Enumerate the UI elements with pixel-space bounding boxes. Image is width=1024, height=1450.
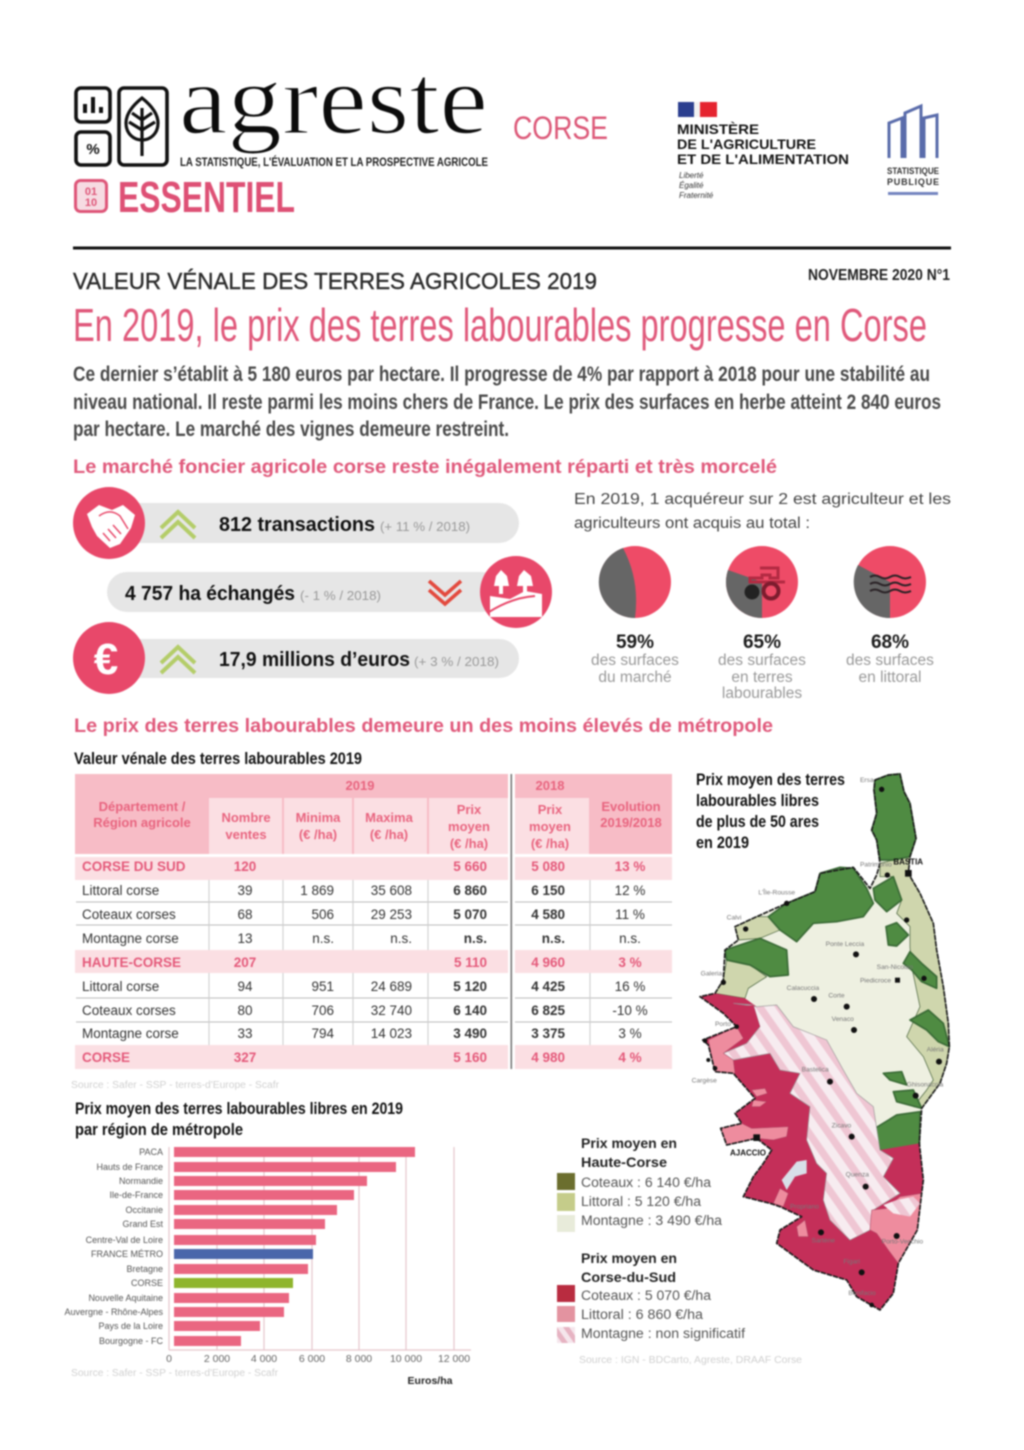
towns: [703, 787, 942, 1307]
row: Coteaux corses sud: Coteaux corses: [82, 907, 176, 922]
legend: Haute-Corse: Haute-Corse: [581, 1155, 668, 1170]
row: Corse du Sud: 5 080: [531, 859, 565, 874]
essentiel label: [76, 173, 295, 222]
tagline: LA STATISTIQUE, L'ÉVALUATION ET LA PROSPECTIVE AGRICOLE: [180, 154, 488, 169]
legend: Corse-du-Sud: Corse-du-Sud: [581, 1270, 676, 1285]
region name: CORSE: [513, 110, 608, 146]
town labels: Bonifacio: [848, 1290, 876, 1297]
icon: tractor: [746, 568, 785, 598]
table header: (€ /ha): [299, 827, 337, 842]
ministry logo: Fraternité: [679, 191, 714, 200]
row: Corse total: CORSE: [82, 1050, 130, 1065]
table header: Evolution: [601, 799, 661, 814]
row: Coteaux corses sud: 11 %: [615, 907, 645, 922]
row: Montagne corse sud: n.s.: [542, 931, 565, 946]
pie: 65 percent: en terres: [731, 669, 793, 686]
legend: Corse-du-Sud: Littoral : 6 860 €/ha: [581, 1307, 704, 1322]
pill: euros: (+ 3 % / 2018): [414, 654, 499, 669]
row: Littoral corse sud: 1 869: [300, 883, 334, 898]
row: Montagne corse sud: n.s.: [619, 931, 641, 946]
map: Corse: [692, 774, 949, 1310]
row: Littoral corse sud: 6 860: [453, 883, 487, 898]
intro paragraph: par hectare. Le marché des vignes demeure restreint.: [73, 418, 509, 441]
row: Montagne corse haute: Montagne corse: [82, 1026, 179, 1041]
legend: Haute-Corse: Littoral : 5 120 €/ha: [581, 1194, 701, 1209]
table header: Département /: [99, 799, 186, 814]
row: Coteaux corses sud: 4 580: [531, 907, 565, 922]
town labels: Cargèse: [692, 1077, 717, 1084]
category labels: [64, 1147, 163, 1346]
icon: land and trees: [489, 570, 542, 617]
table source: Source : Safer - SSP - terres-d'Europe - Scafr: [71, 1080, 280, 1091]
ministry logo: [677, 102, 849, 200]
category labels: Nouvelle Aquitaine: [88, 1293, 163, 1303]
table header: 2019/2018: [600, 815, 662, 830]
pill: transactions: 812 transactions: [219, 514, 375, 536]
legend: Haute-Corse: Prix moyen en: [581, 1136, 677, 1151]
legend: Haute-Corse: Coteaux : 6 140 €/ha: [581, 1175, 712, 1190]
category labels: Occitanie: [125, 1205, 163, 1215]
row: Haute-Corse: 3 %: [618, 955, 642, 970]
text: acquéreurs: [574, 491, 951, 532]
pale hatched patch: [883, 1197, 920, 1217]
row: Haute-Corse: 207: [234, 955, 256, 970]
category labels: Bourgogne - FC: [99, 1336, 163, 1346]
icon: binary box: [76, 180, 106, 212]
row: Montagne corse haute: 3 490: [453, 1026, 487, 1041]
category labels: FRANCE MÉTRO: [91, 1249, 163, 1259]
statistique publique logo: PUBLIQUE: [887, 177, 939, 187]
row: Haute-Corse: HAUTE-CORSE: [82, 955, 181, 970]
Haute-Corse montagne base: [715, 774, 949, 1150]
legend: Haute-Corse: Montagne : 3 490 €/ha: [581, 1213, 723, 1228]
row: Coteaux corses haute: 80: [237, 1003, 253, 1018]
row: Montagne corse haute: 3 375: [531, 1026, 565, 1041]
row: Littoral corse sud: 6 150: [531, 883, 565, 898]
coastline: [700, 774, 949, 1310]
table header: moyen: [529, 819, 571, 834]
pie: 68 percent: [846, 546, 934, 686]
row: Corse du Sud: 5 660: [453, 859, 487, 874]
row: Montagne corse haute: 33: [237, 1026, 253, 1041]
Corse-du-Sud montagne hatch: [723, 1003, 900, 1240]
row: Montagne corse haute: [82, 1026, 642, 1041]
row: Coteaux corses sud: 5 070: [453, 907, 487, 922]
chart title: par région de métropole: [75, 1120, 243, 1139]
row: Littoral corse sud: 35 608: [371, 883, 412, 898]
axis labels: 2 000: [204, 1353, 230, 1365]
axis labels: 0: [166, 1353, 172, 1365]
section heading: marché foncier: Le marché foncier agricole corse reste inégalement réparti et très morcelé: [73, 457, 777, 478]
pie: 65 percent: [718, 546, 806, 702]
icon: handshake: [87, 505, 135, 548]
icon: french flag: [678, 102, 717, 117]
town labels: Quenza: [846, 1172, 869, 1179]
statistique publique logo: [887, 106, 939, 195]
legend: Corse-du-Sud: Montagne : non significatif: [581, 1326, 745, 1341]
pill: euros: 17,9 millions d’euros: [219, 649, 410, 671]
row: Corse total: 4 %: [618, 1050, 642, 1065]
Corse-du-Sud crimson patch: [700, 995, 760, 1037]
bar chart: prix par région: Euros/ha: [408, 1375, 453, 1387]
row: Littoral corse haute: Littoral corse: [82, 979, 159, 994]
row: Corse du Sud: 13 %: [615, 859, 645, 874]
icon: up chevrons: [161, 512, 195, 538]
kicker: VALEUR VÉNALE DES TERRES AGRICOLES 2019: [73, 268, 597, 294]
Haute-Corse coteaux: [725, 774, 949, 1155]
town labels: AJACCIO: [730, 1148, 766, 1157]
bars: [174, 1147, 415, 1346]
row: Littoral corse sud: [82, 883, 645, 898]
table header: ventes: [225, 827, 267, 842]
row: Coteaux corses sud: 68: [237, 907, 253, 922]
Corse-du-Sud coteaux: [700, 993, 923, 1310]
pie: 65 percent: 65%: [743, 632, 781, 653]
table header: (€ /ha): [370, 827, 408, 842]
category labels: Normandie: [119, 1176, 163, 1186]
category labels: PACA: [139, 1147, 163, 1157]
pie: 68 percent: des surfaces: [846, 652, 934, 669]
row: Coteaux corses haute: Coteaux corses: [82, 1003, 176, 1018]
row: Littoral corse sud: Littoral corse: [82, 883, 159, 898]
row: Coteaux corses haute: 6 140: [453, 1003, 487, 1018]
panel: key figures: [73, 487, 552, 694]
town labels: Zicavo: [832, 1123, 852, 1130]
row: Coteaux corses haute: [82, 1003, 648, 1018]
town labels: Piedicroce: [860, 977, 891, 984]
chart source: Source : Safer - SSP - terres-d'Europe - Scafr: [71, 1368, 279, 1379]
pie: 59 percent: 59%: [616, 632, 654, 653]
table header: Région agricole: [93, 815, 191, 830]
row: Littoral corse haute: 5 120: [453, 979, 487, 994]
town labels: Galeria: [701, 970, 722, 977]
town labels: L'Île-Rousse: [758, 888, 795, 897]
ministry logo: Égalité: [679, 181, 704, 190]
row: Littoral corse haute: 4 425: [531, 979, 565, 994]
row: Montagne corse haute: 794: [311, 1026, 334, 1041]
table header: Prix: [457, 802, 482, 817]
axis labels: 10 000: [390, 1353, 422, 1365]
icon: down chevrons: [429, 581, 461, 604]
row: Coteaux corses haute: 6 825: [531, 1003, 565, 1018]
legend: Corse-du-Sud: Prix moyen en: [581, 1251, 677, 1266]
pie: 68 percent: en littoral: [859, 669, 921, 686]
table title: Valeur vénale des terres labourables 2019: [74, 749, 362, 768]
town labels: Porto-Vecchio: [882, 1238, 923, 1245]
agreste logo: [76, 44, 488, 169]
row: Montagne corse haute: 14 023: [371, 1026, 412, 1041]
town labels: Calvi: [727, 914, 742, 921]
town labels: Aléria: [927, 1047, 944, 1054]
map title: Prix moyen des terres: [696, 770, 845, 789]
category labels: Pays de la Loire: [98, 1321, 163, 1331]
legend: Corse-du-Sud: [557, 1251, 745, 1343]
pie: 59 percent: [591, 546, 679, 686]
table header: Maxima: [365, 810, 414, 825]
section heading: prix: Le prix des terres labourables demeure un des moins élevés de métropole: [74, 716, 773, 737]
pie: 68 percent: 68%: [871, 632, 909, 653]
text: acquéreurs: En 2019, 1 acquéreur sur 2 est agriculteur et les: [574, 491, 951, 508]
category labels: Hauts de France: [96, 1162, 163, 1172]
pill: transactions: (+ 11 % / 2018): [380, 519, 470, 534]
icon: binary box: 10: [85, 197, 97, 209]
pill: euros: [73, 622, 519, 694]
row: Coteaux corses sud: [82, 907, 645, 922]
icon: binary box: 01: [85, 186, 97, 198]
row: Littoral corse haute: 94: [237, 979, 253, 994]
table header: Prix: [538, 802, 563, 817]
town labels: Patrimonio: [860, 862, 892, 869]
row: Corse total: 5 160: [453, 1050, 487, 1065]
chart title: [75, 1099, 403, 1139]
table header: (€ /ha): [450, 836, 488, 851]
pill: hectares: (- 1 % / 2018): [300, 588, 381, 603]
icon: percent box: [76, 132, 110, 165]
row: Corse du Sud: 120: [234, 859, 256, 874]
table header: Nombre: [221, 810, 271, 825]
pie: 65 percent: labourables: [722, 685, 802, 702]
table: valeur vénale: [75, 774, 672, 1069]
wordmark: agreste: [179, 44, 488, 155]
map source: Source : IGN - BDCarto, Agreste, DRAAF Corse: [579, 1355, 802, 1366]
row: Corse du Sud: CORSE DU SUD: [82, 859, 186, 874]
row: Corse total: 327: [234, 1050, 256, 1065]
table header: (€ /ha): [531, 836, 569, 851]
icon: percent box: %: [86, 141, 100, 158]
icon: euro: €: [94, 635, 118, 684]
row: Montagne corse sud: n.s.: [390, 931, 412, 946]
table header: 2018: [536, 778, 564, 793]
pie: 59 percent: des surfaces: [591, 652, 679, 669]
row: Coteaux corses haute: 32 740: [371, 1003, 412, 1018]
town labels: Sartène: [812, 1238, 835, 1245]
legend: Corse-du-Sud: Coteaux : 5 070 €/ha: [581, 1288, 712, 1303]
pie: 65 percent: des surfaces: [718, 652, 806, 669]
row: Haute-Corse: 5 110: [454, 955, 487, 970]
row: Montagne corse sud: Montagne corse: [82, 931, 179, 946]
row: Corse total: 4 980: [531, 1050, 565, 1065]
town labels: Bastelica: [802, 1067, 829, 1074]
row: Littoral corse haute: [82, 979, 645, 994]
category labels: Grand Est: [122, 1219, 163, 1229]
issue date: NOVEMBRE 2020 N°1: [808, 267, 950, 284]
axis labels: 6 000: [299, 1353, 325, 1365]
row: Coteaux corses haute: 706: [311, 1003, 334, 1018]
map title: [696, 770, 845, 852]
pill: hectares: [107, 556, 552, 628]
icon: buildings: [889, 106, 937, 158]
row: Montagne corse haute: 3 %: [618, 1026, 642, 1041]
statistique publique logo: STATISTIQUE: [887, 166, 939, 176]
town labels: San-Nicolao: [877, 964, 913, 971]
map title: en 2019: [696, 833, 749, 852]
row: Coteaux corses sud: 506: [311, 907, 334, 922]
lake area: [782, 1160, 807, 1190]
table header: [75, 774, 672, 854]
map title: de plus de 50 ares: [696, 812, 819, 831]
chart title: Prix moyen des terres labourables libres en 2019: [75, 1099, 403, 1118]
town labels: BASTIA: [893, 858, 923, 867]
town labels: [692, 777, 944, 1297]
town labels: Ponte Leccia: [826, 941, 864, 948]
row: Littoral corse sud: 39: [237, 883, 253, 898]
ministry logo: DE L'AGRICULTURE: [677, 136, 816, 152]
row: Coteaux corses haute: -10 %: [612, 1003, 648, 1018]
town labels: Ersa: [860, 777, 874, 784]
pill: hectares: 4 757 ha échangés: [125, 583, 295, 605]
pill: transactions: [73, 487, 519, 559]
axis labels: 8 000: [346, 1353, 372, 1365]
category labels: CORSE: [131, 1278, 163, 1288]
row: Corse du Sud: [82, 859, 645, 874]
row: Montagne corse sud: [82, 931, 641, 946]
category labels: Auvergne - Rhône-Alpes: [64, 1307, 163, 1317]
row: Littoral corse haute: 24 689: [371, 979, 412, 994]
pie: 59 percent: du marché: [598, 669, 672, 686]
ministry logo: MINISTÈRE: [677, 121, 759, 137]
table header: 2019: [346, 778, 374, 793]
map title: labourables libres: [696, 791, 819, 810]
town labels: Porto: [715, 1021, 731, 1028]
icon: waves: [870, 576, 911, 592]
row: Littoral corse haute: 16 %: [615, 979, 645, 994]
row: Littoral corse sud: 12 %: [615, 883, 645, 898]
row: Haute-Corse: [82, 955, 642, 970]
legend: Haute-Corse: [557, 1136, 723, 1232]
category labels: Ile-de-France: [109, 1190, 163, 1200]
row: Haute-Corse: 4 960: [531, 955, 565, 970]
axis labels: [166, 1353, 470, 1365]
town labels: Venaco: [832, 1016, 854, 1023]
row: Coteaux corses sud: 29 253: [371, 907, 412, 922]
row: Corse total: [82, 1050, 642, 1065]
town labels: Figari: [843, 1258, 860, 1265]
row: Montagne corse sud: 13: [237, 931, 253, 946]
axis labels: 4 000: [251, 1353, 277, 1365]
category labels: Bretagne: [126, 1264, 163, 1274]
intro paragraph: [73, 363, 941, 441]
row: Montagne corse sud: n.s.: [312, 931, 334, 946]
town labels: Corte: [828, 993, 845, 1000]
table header: moyen: [448, 819, 490, 834]
table header: Minima: [296, 810, 341, 825]
row: Littoral corse haute: 951: [311, 979, 334, 994]
town labels: Propriano: [790, 1203, 819, 1210]
ministry logo: Liberté: [679, 171, 704, 180]
icon: leaf box: [119, 88, 167, 165]
town labels: Ghisonaccia: [907, 1082, 944, 1089]
Corse-du-Sud littoral: [708, 1027, 922, 1263]
town labels: Calacuccia: [787, 985, 820, 992]
row: Montagne corse sud: n.s.: [464, 931, 487, 946]
axis labels: 12 000: [438, 1353, 470, 1365]
essentiel word: ESSENTIEL: [118, 173, 295, 222]
category labels: Centre-Val de Loire: [86, 1235, 163, 1245]
text: acquéreurs: agriculteurs ont acquis au total :: [574, 515, 810, 532]
bar chart: prix par région: [64, 1147, 471, 1387]
ministry logo: ET DE L'ALIMENTATION: [677, 151, 849, 167]
icon: bar chart box: [76, 88, 110, 122]
Haute-Corse littoral: [715, 857, 949, 1108]
icon: up chevrons: [161, 647, 195, 673]
